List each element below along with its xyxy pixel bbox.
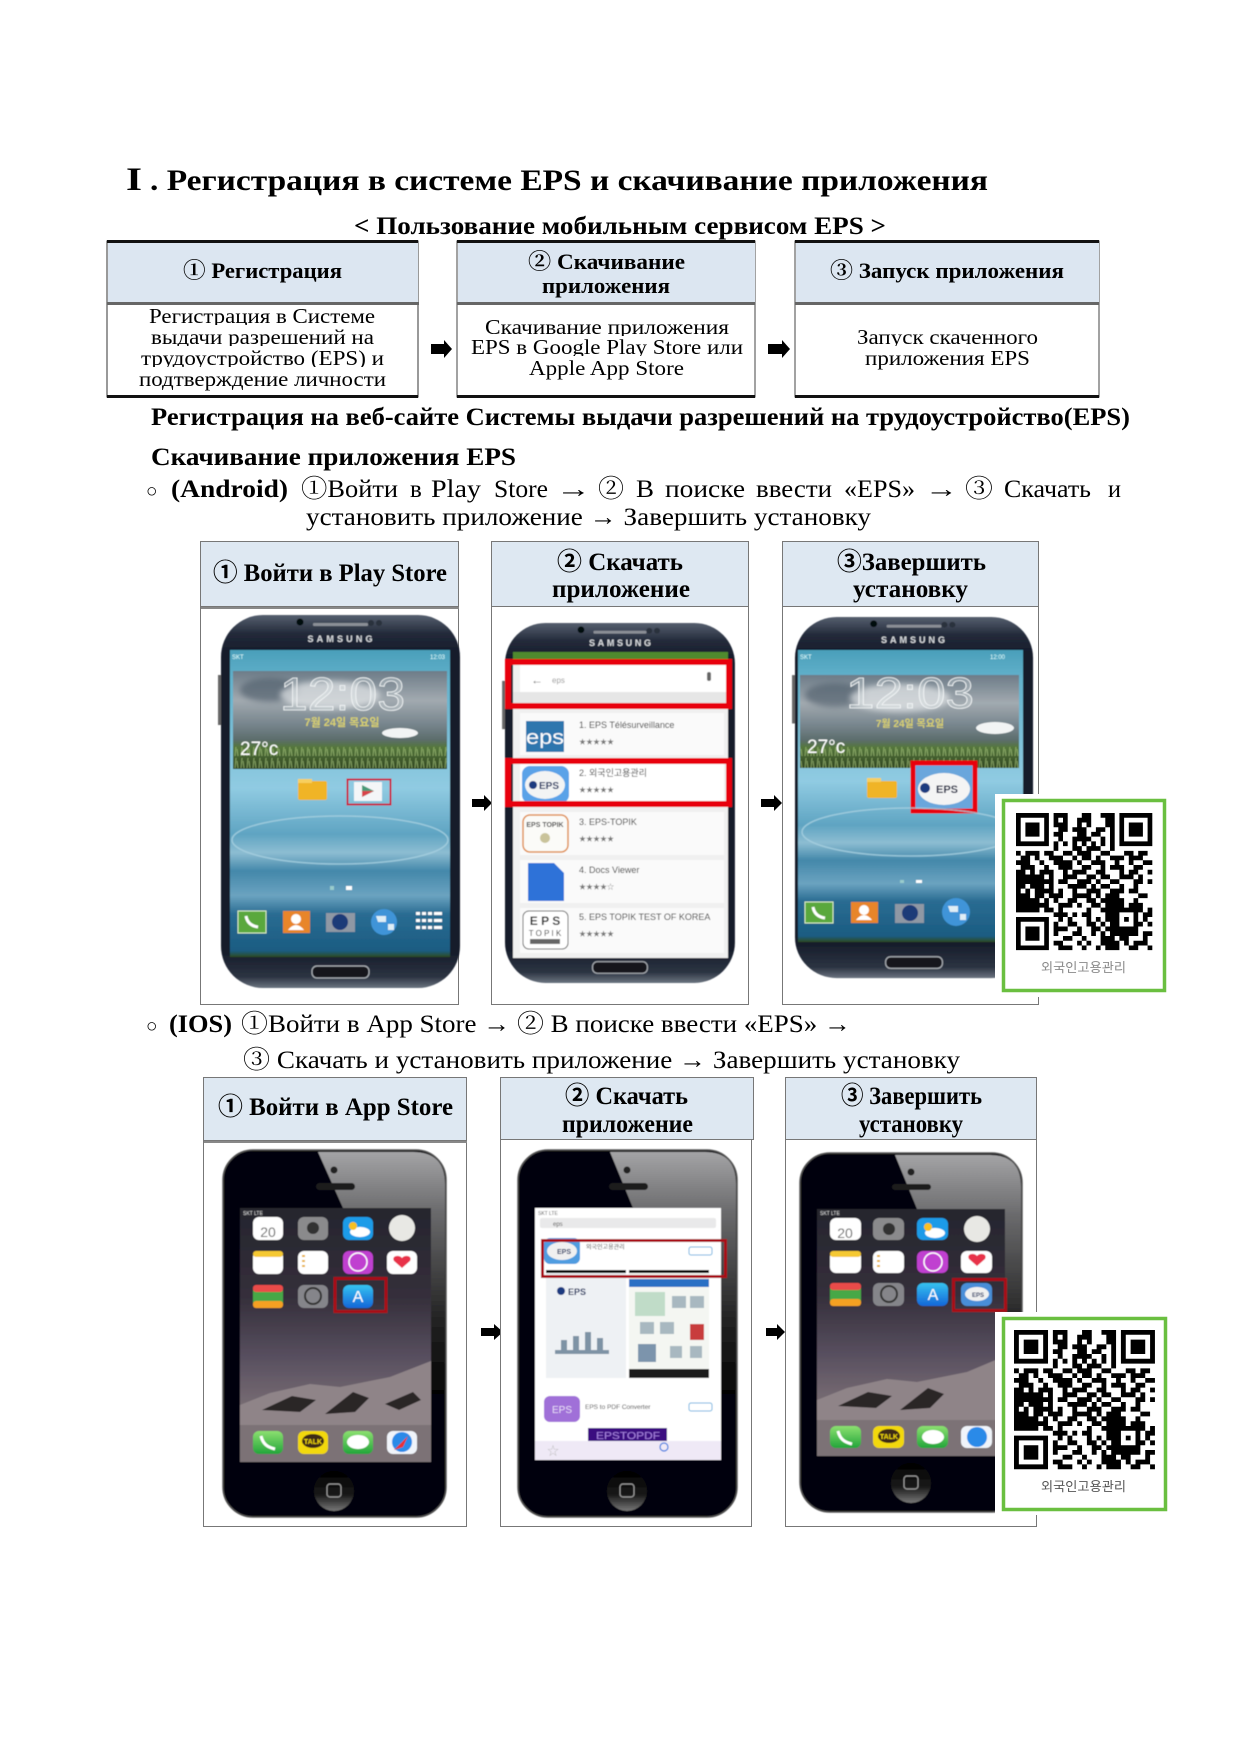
panel: android step 3	[782, 542, 1038, 1004]
panel header: ③Завершить	[837, 542, 986, 578]
dock: TALK	[304, 1439, 322, 1446]
panel header: ② Скачать	[565, 1076, 688, 1112]
list rows: ★★★★★	[579, 786, 614, 794]
text: iOS steps: ①Войти в App Store → ② В поиске ввести «EPS» →	[241, 1010, 851, 1038]
icon: folder	[867, 778, 897, 798]
panel: download: ② Скачивание	[528, 249, 685, 274]
phone: samsung installed: SAMSUNG	[881, 635, 945, 645]
panel header	[492, 542, 748, 606]
panel: download: Скачивание приложения	[485, 315, 729, 339]
phone: iPhone installed: SKT LTE	[820, 1211, 840, 1217]
highlight: EPS result	[542, 1240, 726, 1276]
panel header	[204, 1078, 467, 1143]
icon: play store highlighted	[348, 780, 390, 804]
panel header	[782, 542, 1038, 606]
panel header: установку	[859, 1111, 963, 1138]
phone: samsung installed	[792, 617, 1033, 978]
phone: iPhone home	[223, 1150, 446, 1517]
text: android steps: «EPS»	[844, 476, 915, 503]
arrow	[472, 795, 492, 811]
phone: samsung home: 12:03	[430, 655, 446, 661]
panel: registration: Регистрация в Системе	[149, 304, 375, 328]
list rows: EPS	[539, 781, 559, 792]
panel: android step 2	[492, 542, 748, 1004]
list rows: 2. 외국인고용관리	[579, 767, 647, 778]
list rows: ★★★★☆	[579, 882, 614, 891]
panel header	[200, 542, 459, 609]
panel: launch: Запуск скаченного	[857, 325, 1038, 349]
QR card: iOS: 외국인고용관리	[1041, 1479, 1126, 1494]
icon: folder	[298, 779, 327, 800]
highlight: search bar	[508, 662, 729, 706]
text: android steps: в	[410, 476, 422, 503]
title: . Регистрация в системе EPS и скачивание приложения	[150, 164, 988, 197]
panel: iOS step 3	[786, 1076, 1036, 1526]
text: android steps	[146, 475, 1121, 531]
text: android steps: →	[556, 476, 591, 503]
panel: download: EPS в Google Play Store или	[471, 335, 743, 359]
phone: samsung search results: ←	[531, 673, 543, 687]
app grid: EPS	[972, 1293, 984, 1299]
highlight: EPS result	[508, 761, 729, 804]
panel: launch: ③ Запуск приложения	[830, 258, 1064, 283]
list rows: 5. EPS TOPIK TEST OF KOREA	[579, 912, 710, 922]
phone: iPhone installed	[800, 1153, 1022, 1512]
panel: android step 1	[200, 542, 460, 1004]
text: android steps: Store	[494, 476, 548, 503]
panel: iOS step 2	[500, 1076, 754, 1526]
list rows: 4. Docs Viewer	[579, 865, 639, 875]
list rows: eps	[526, 727, 564, 749]
dock	[830, 1426, 992, 1448]
text: iOS steps	[146, 1010, 961, 1074]
panel header: ③ Завершить	[841, 1076, 982, 1112]
panel header: установку	[853, 576, 968, 603]
QR card: android	[995, 794, 1175, 997]
subtitle: < Пользование мобильным сервисом EPS >	[354, 213, 886, 240]
panel: download: приложения	[542, 273, 670, 298]
phone: samsung home: 7월 24일 목요일	[304, 715, 380, 729]
panel: download	[457, 240, 755, 398]
panel header: ② Скачать	[557, 542, 683, 578]
icon: EPS highlighted	[913, 763, 975, 811]
panel: launch	[795, 240, 1099, 398]
list rows: 1. EPS Télésurveillance	[579, 720, 674, 730]
text: android steps: ввести	[756, 476, 832, 503]
app grid: A	[928, 1287, 939, 1304]
text: android steps: поиске	[665, 476, 745, 503]
highlight: EPS app	[954, 1280, 1006, 1310]
panel: iOS step 1	[204, 1078, 467, 1526]
arrow	[766, 1324, 785, 1340]
phone: samsung home: 27°c	[240, 739, 278, 760]
text: android steps: (Android)	[171, 476, 288, 503]
result: EPS to PDF: EPSTOPDF	[596, 1431, 660, 1442]
list rows: ★★★★★	[579, 930, 614, 938]
text: android steps: Play	[431, 476, 482, 503]
text: android steps: установить приложение → Завершить установку	[306, 504, 872, 531]
result: EPS app	[544, 1238, 712, 1264]
panel header: приложение	[552, 576, 690, 603]
highlight: app store	[335, 1278, 386, 1312]
phone: samsung installed: 12:00	[990, 655, 1006, 661]
result: EPS app: EPS	[557, 1249, 571, 1256]
app screenshots: EPS	[568, 1287, 586, 1297]
title: I	[126, 162, 142, 198]
QR card: android: 외국인고용관리	[1041, 960, 1126, 975]
panel: registration: подтверждение личности	[139, 367, 386, 391]
icon: EPS highlighted: EPS	[936, 784, 958, 796]
app grid: A	[353, 1289, 364, 1306]
panel header: ① Войти в Play Store	[213, 553, 447, 589]
list rows: 3. EPS-TOPIK	[579, 817, 637, 827]
phone: samsung installed: 27°c	[807, 737, 845, 758]
panel: registration: ① Регистрация	[183, 258, 342, 283]
dock	[253, 1431, 417, 1454]
result: EPS to PDF: EPS to PDF Converter	[585, 1404, 651, 1411]
arrow	[761, 795, 782, 811]
text: android steps: и	[1108, 476, 1121, 503]
phone: samsung home: SAMSUNG	[308, 634, 372, 644]
dock icons	[238, 909, 442, 935]
arrow	[768, 340, 790, 358]
phone: samsung search results: SAMSUNG	[589, 638, 651, 648]
heading: app download: Скачивание приложения EPS	[151, 444, 516, 471]
text: android steps: Скачать	[1004, 476, 1091, 503]
panel: registration	[107, 240, 419, 398]
text: iOS steps: (IOS)	[169, 1011, 232, 1038]
panel: registration: трудоустройство (EPS) и	[141, 346, 384, 370]
heading: web registration: Регистрация на веб-сайте Системы выдачи разрешений на трудоустройство(EPS)	[151, 404, 1130, 431]
list rows	[520, 713, 724, 953]
text: android steps: ○	[146, 481, 157, 502]
phone: samsung installed: 7월 24일 목요일	[876, 717, 944, 730]
panel header: приложение	[562, 1111, 693, 1138]
arrow	[481, 1324, 503, 1340]
arrow	[431, 340, 452, 358]
phone: iPhone App Store search: eps	[553, 1222, 563, 1228]
app grid: 20	[837, 1225, 853, 1241]
phone: iPhone App Store search	[518, 1150, 737, 1517]
dock icons	[805, 898, 970, 926]
list rows: EPS TOPIK	[526, 822, 564, 829]
list rows: ★★★★★	[579, 738, 614, 746]
QR card: iOS	[995, 1312, 1175, 1515]
phone: samsung home: 12:03	[280, 668, 405, 720]
panel header	[500, 1076, 754, 1140]
panel: download: Apple App Store	[529, 356, 684, 380]
phone: iPhone App Store search: ☆	[547, 1444, 559, 1458]
text: iOS steps: ○	[146, 1016, 157, 1037]
panel: registration: выдачи разрешений на	[151, 325, 374, 349]
result: EPS app: 외국인고용관리	[586, 1243, 625, 1251]
panel: launch: приложения EPS	[865, 346, 1030, 370]
phone: samsung home	[218, 615, 460, 988]
phone: samsung search results	[502, 623, 735, 983]
phone: samsung home: SKT	[232, 655, 244, 661]
app grid	[253, 1215, 417, 1308]
text: iOS steps: ③ Скачать и установить приложение → Завершить установку	[243, 1046, 961, 1074]
result: EPS to PDF: EPS	[552, 1405, 572, 1416]
app grid	[830, 1216, 992, 1306]
text: android steps: В	[636, 476, 654, 503]
app grid: 20	[260, 1224, 276, 1240]
dock: TALK	[880, 1434, 898, 1441]
text: android steps: ②	[598, 475, 624, 503]
phone: iPhone App Store search: SKT LTE	[538, 1211, 558, 1217]
panel header: ① Войти в App Store	[218, 1087, 453, 1123]
phone: samsung installed: 12:03	[846, 669, 974, 718]
phone: samsung installed: SKT	[800, 655, 812, 661]
text: android steps: ③	[965, 475, 993, 503]
result: EPS to PDF	[544, 1396, 712, 1442]
flow table	[107, 240, 1099, 398]
text: android steps: →	[925, 476, 958, 503]
phone: samsung search results: eps	[552, 676, 565, 685]
list rows: T O P I K	[529, 929, 562, 938]
text: android steps: ①Войти	[301, 475, 398, 503]
list rows: E P S	[530, 914, 560, 928]
panel header	[786, 1076, 1036, 1140]
app screenshots	[546, 1270, 709, 1378]
list rows: ★★★★★	[579, 835, 614, 843]
phone: iPhone home: SKT LTE	[243, 1211, 263, 1217]
